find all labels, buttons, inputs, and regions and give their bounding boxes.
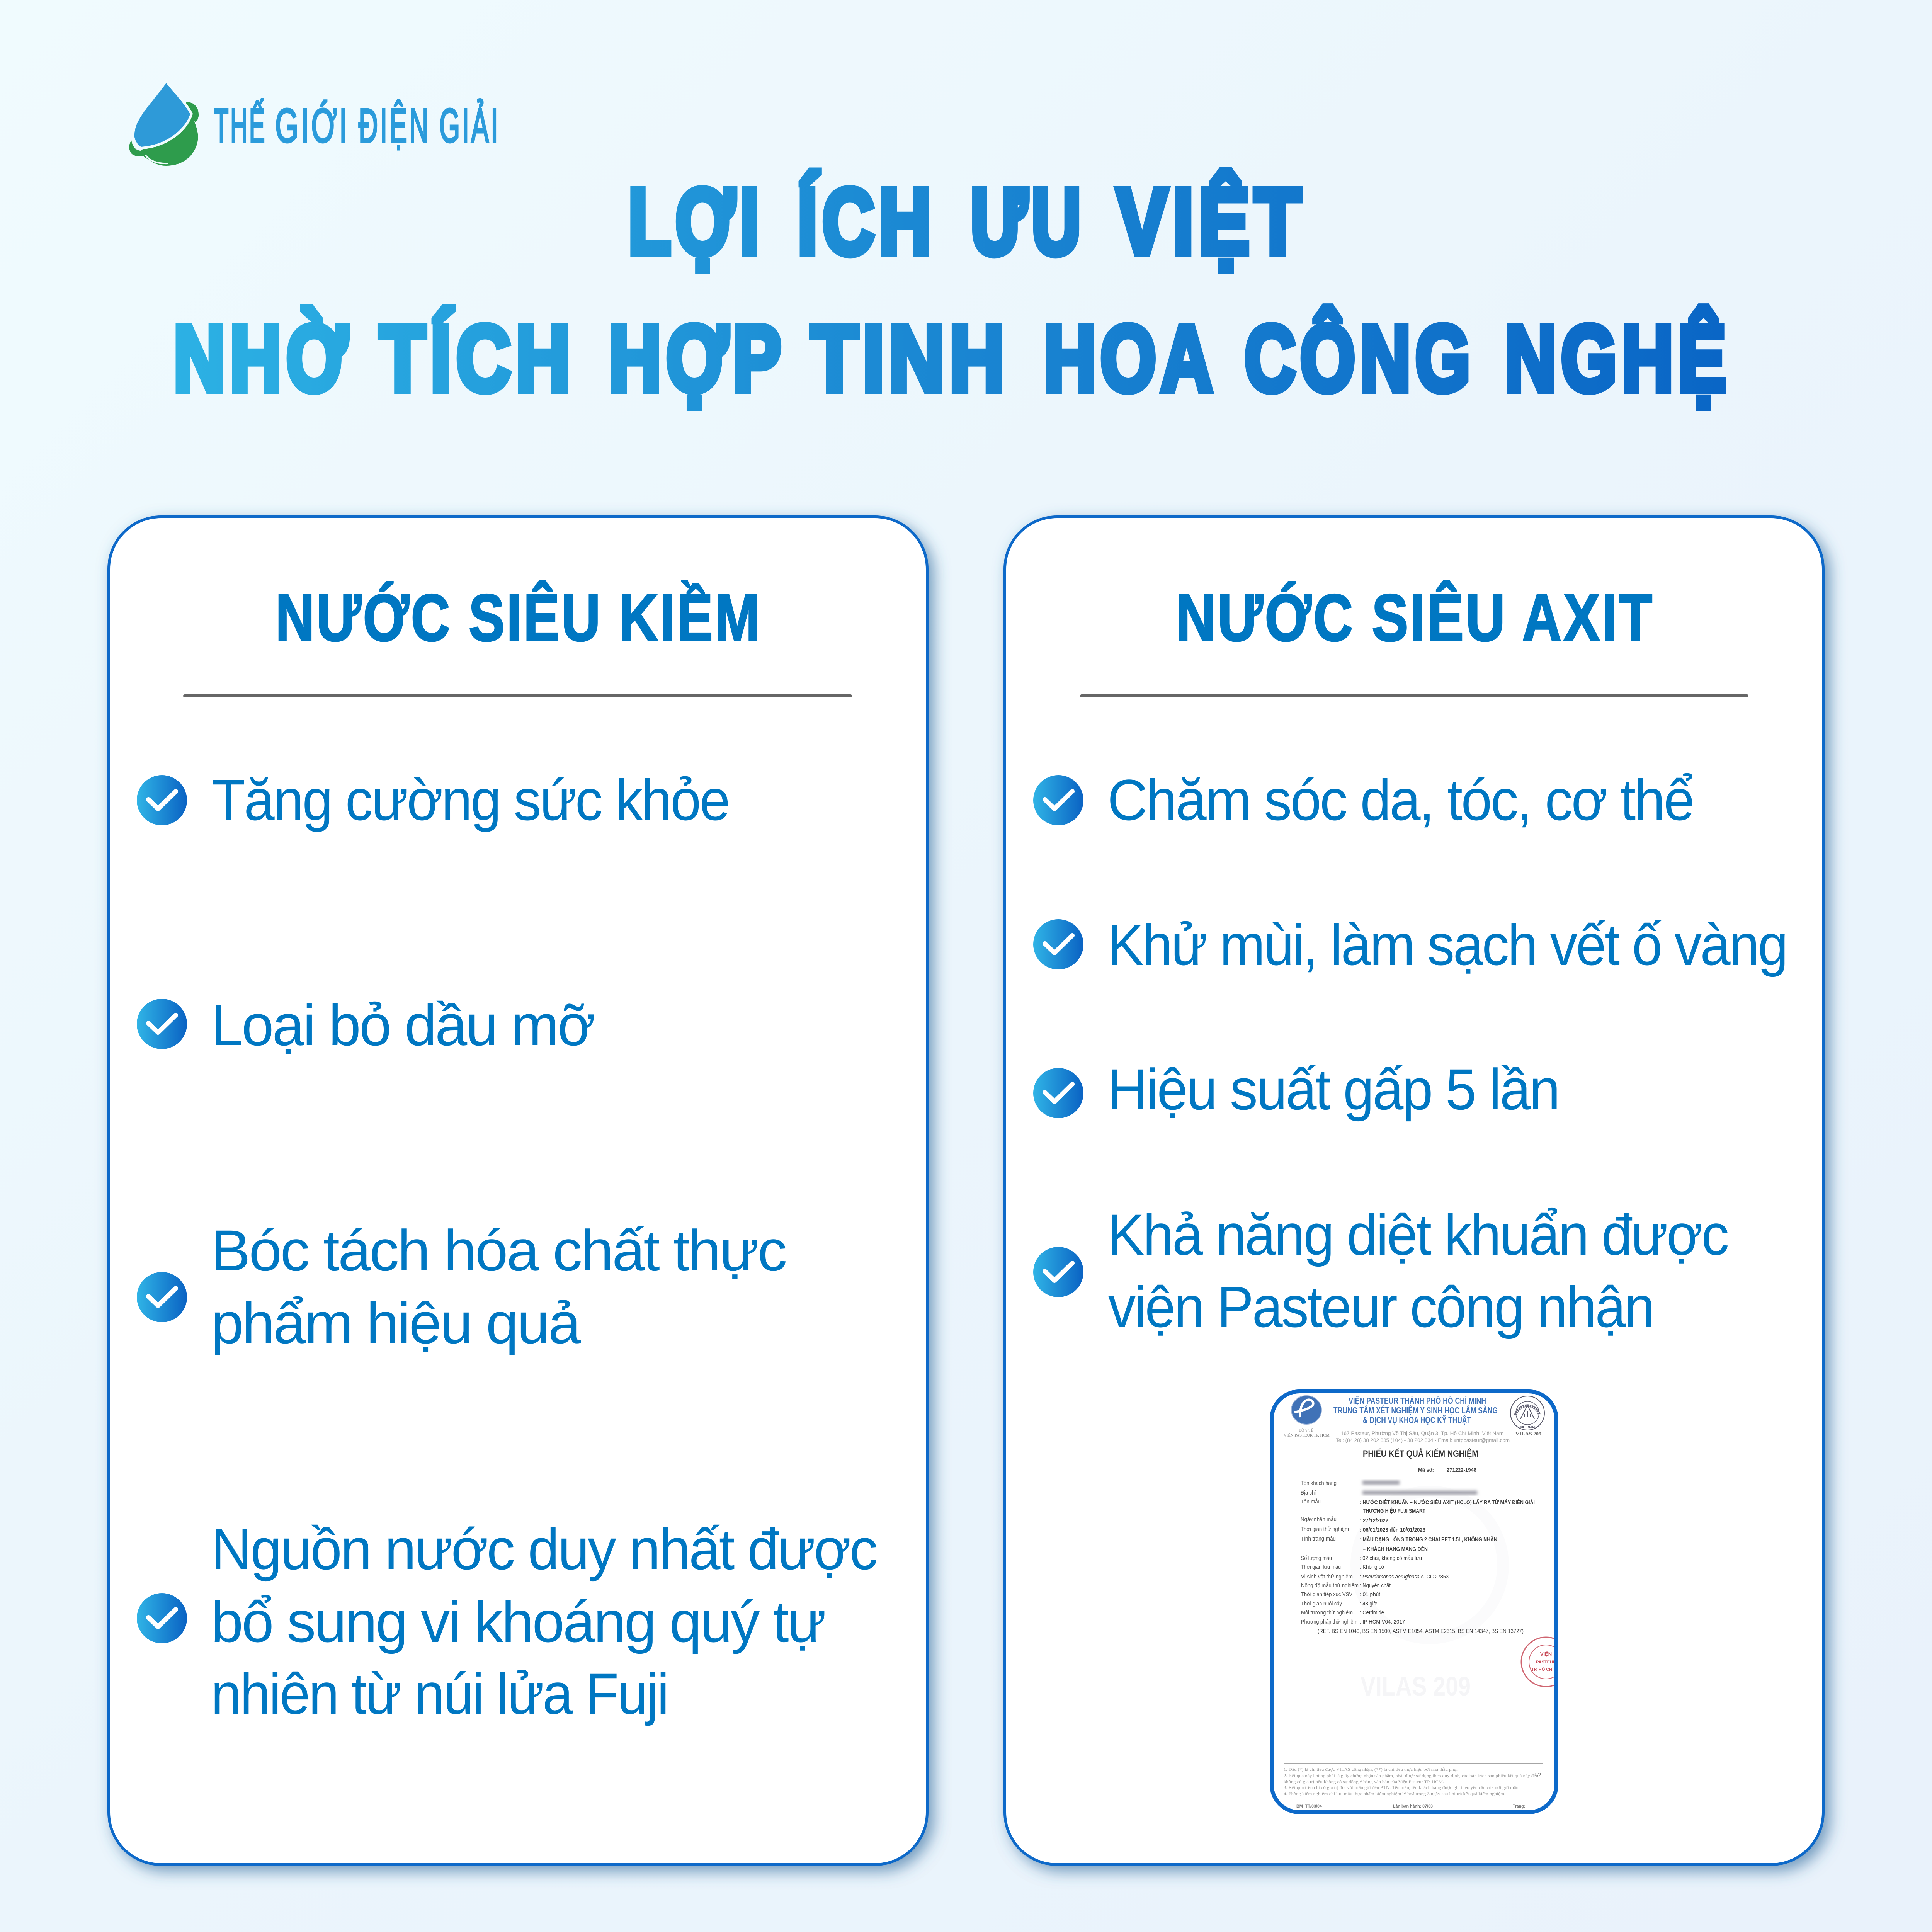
logo wordmark: GIẢI — [439, 99, 500, 153]
title line 1: LỢI — [628, 170, 764, 274]
document field labels: Vi sinh vật thử nghiệm — [1301, 1573, 1353, 1580]
document field values: : 27/12/2022 — [1360, 1517, 1388, 1524]
document field labels: Thời gian nuôi cấy — [1301, 1600, 1342, 1607]
document field labels: Tên khách hàng — [1301, 1480, 1337, 1486]
title — [173, 170, 1731, 411]
benefit: tăng cường sức khỏe: Tăng cường sức khỏe — [212, 767, 729, 832]
footer notes: 2. Kết quả này không phải là giấy chứng nhận sản phẩm, phải được sử dụng theo quy định, các bản trích sao phiếu kết quả này đều — [1284, 1773, 1538, 1778]
footer notes — [1284, 1764, 1543, 1809]
benefit: hiệu suất: Hiệu suất gấp 5 lần — [1107, 1057, 1559, 1122]
document letterhead: VIỆN PASTEUR THÀNH PHỐ HỒ CHÍ MINH — [1349, 1395, 1486, 1406]
document field labels: Tên mẫu — [1301, 1498, 1321, 1505]
benefit: khả năng diệt khuẩn: viện Pasteur công nhận — [1108, 1274, 1653, 1339]
document field values: – KHÁCH HÀNG MANG ĐẾN — [1363, 1546, 1428, 1553]
benefit: chăm sóc da: Chăm sóc da, tóc, cơ thể — [1107, 767, 1693, 832]
document number: 271222-1948 — [1447, 1467, 1476, 1473]
footer notes: 1/2 — [1535, 1772, 1541, 1777]
document letterhead — [1333, 1395, 1510, 1443]
benefit: nguồn nước vi khoáng — [137, 1517, 877, 1726]
document letterhead: 167 Pasteur, Phường Võ Thị Sáu, Quận 3, Tp. Hồ Chí Minh, Việt Nam — [1341, 1430, 1503, 1436]
document field labels: Thời gian lưu mẫu — [1301, 1564, 1341, 1570]
watermark: VILAS 209 — [1361, 1671, 1471, 1701]
test report document — [1272, 1391, 1571, 1812]
document field values: : Nguyên chất — [1360, 1582, 1391, 1589]
document field labels: Thời gian tiếp xúc VSV — [1301, 1591, 1352, 1598]
accreditation logo: VILAS 209 — [1515, 1431, 1542, 1437]
document number — [1418, 1467, 1476, 1473]
blurred customer details — [1362, 1481, 1477, 1495]
panel: nước siêu kiềm — [109, 517, 927, 1865]
document field labels: Môi trường thử nghiệm — [1301, 1609, 1353, 1616]
panel heading: NƯỚC SIÊU KIỀM — [276, 581, 762, 655]
red stamp: PASTEUR — [1536, 1660, 1556, 1665]
document field values: (REF. BS EN 1040, BS EN 1500, ASTM E1054, ASTM E2315, BS EN 14347, BS EN 13727) — [1318, 1628, 1524, 1634]
benefit: bóc tách hóa chất: phẩm hiệu quả — [211, 1291, 581, 1355]
footer notes: không có giá trị nếu không có sự đồng ý bằng văn bản của Viện Pasteur TP. HCM. — [1284, 1779, 1444, 1784]
document field values: : Pseudomonas aeruginosa ATCC 27853 — [1360, 1573, 1449, 1580]
logo wordmark: THẾ — [214, 99, 267, 153]
document field labels: Ngày nhận mẫu — [1301, 1516, 1337, 1523]
benefit: loại bỏ dầu mỡ: Loại bỏ dầu mỡ — [211, 993, 594, 1058]
accreditation logo: VIET NAM — [1520, 1425, 1535, 1429]
document field values: : 06/01/2023 đến 10/01/2023 — [1360, 1527, 1425, 1533]
institute logo: VIỆN PASTEUR TP. HCM — [1284, 1433, 1330, 1438]
benefit: nguồn nước vi khoáng: nhiên từ núi lửa Fuji — [211, 1661, 668, 1726]
title line 2: CÔNG — [1245, 306, 1475, 411]
document field labels: Phương pháp thử nghiệm — [1301, 1619, 1357, 1625]
title line 1: VIỆT — [1117, 170, 1306, 274]
footer notes: 4. Phòng kiểm nghiệm chỉ lưu mẫu thực phẩm kiểm nghiệm lý hoá trong 3 ngày sau khi trả kết quả kiểm nghiệm. — [1284, 1791, 1505, 1796]
panel heading: NƯỚC SIÊU AXIT — [1176, 581, 1654, 655]
document field values: : Cetrimide — [1360, 1609, 1384, 1616]
document field values: : 48 giờ — [1360, 1600, 1377, 1607]
document field values: : NƯỚC DIỆT KHUẨN – NƯỚC SIÊU AXIT (HCLO) LẤY RA TỪ MÁY ĐIỆN GIẢI — [1360, 1499, 1535, 1506]
document field values: : IP HCM V04: 2017 — [1360, 1619, 1405, 1625]
benefit: khả năng diệt khuẩn: Khả năng diệt khuẩn được — [1107, 1202, 1728, 1267]
logo: Thế Giới Điện Giải — [129, 83, 500, 166]
benefit: bóc tách hóa chất: Bóc tách hóa chất thực — [211, 1218, 786, 1283]
footer notes: Trang: — [1513, 1804, 1525, 1809]
red stamp: VIỆN — [1540, 1651, 1552, 1657]
document field labels: Số lượng mẫu — [1301, 1555, 1332, 1561]
institute logo — [1284, 1396, 1330, 1438]
document field values: : Không có — [1360, 1564, 1384, 1570]
red stamp — [1521, 1637, 1571, 1687]
title line 1 — [628, 170, 1306, 274]
document field labels: Địa chỉ — [1301, 1490, 1316, 1496]
logo wordmark: GIỚI — [275, 99, 350, 153]
title line 2 — [173, 306, 1731, 411]
title line 1: ÍCH — [798, 170, 936, 274]
panel: nước siêu axit — [1005, 517, 1823, 1865]
watermark — [1361, 1677, 1470, 1696]
footer notes: 1. Dấu (*) là chỉ tiêu được VILAS công nhận; (**) là chỉ tiêu thực hiện bởi nhà thầu phụ. — [1284, 1767, 1458, 1772]
benefit: bóc tách hóa chất — [137, 1218, 786, 1355]
document field values — [1318, 1499, 1535, 1634]
title line 2: HOA — [1044, 306, 1217, 411]
document field values: : 01 phút — [1360, 1591, 1381, 1598]
document field values: : 02 chai, không có mẫu lưu — [1360, 1555, 1422, 1561]
document letterhead: & DỊCH VỤ KHOA HỌC KỸ THUẬT — [1363, 1415, 1471, 1425]
document field labels: Thời gian thử nghiệm — [1301, 1526, 1349, 1532]
title line 2: HỢP — [609, 306, 786, 411]
title line 2: TÍCH — [379, 306, 575, 411]
title line 2: TINH — [811, 306, 1010, 411]
logo wordmark: ĐIỆN — [359, 99, 430, 153]
icon: water drop with green swoosh — [129, 83, 199, 166]
footer notes: BM_TT/03/04 — [1296, 1804, 1322, 1809]
document field labels: Nồng độ mẫu thử nghiệm — [1301, 1582, 1359, 1589]
logo wordmark — [214, 99, 500, 153]
benefit: nguồn nước vi khoáng: Nguồn nước duy nhất được — [211, 1517, 877, 1582]
footer notes: 3. Kết quả trên chỉ có giá trị đối với mẫu gửi đến PTN. Tên mẫu, tên khách hàng được ghi theo yêu cầu của nơi gửi mẫu. — [1284, 1785, 1520, 1790]
title line 1: ƯU — [971, 170, 1085, 274]
title line 2: NGHỆ — [1505, 306, 1731, 411]
document field labels: Tình trạng mẫu — [1301, 1536, 1336, 1542]
title line 2: NHỜ — [173, 306, 352, 411]
benefit: khả năng diệt khuẩn — [1033, 1202, 1728, 1339]
red stamp: TP. HỒ CHÍ MINH — [1531, 1667, 1565, 1672]
benefit: khử mùi: Khử mùi, làm sạch vết ố vàng — [1107, 912, 1787, 977]
document field values: THƯƠNG HIỆU FUJI SMART — [1363, 1507, 1425, 1514]
document letterhead: TRUNG TÂM XÉT NGHIỆM Y SINH HỌC LÂM SÀNG — [1333, 1405, 1498, 1415]
document field values: : MẪU DẠNG LỎNG TRONG 2 CHAI PET 1.5L, KHÔNG NHÃN — [1360, 1536, 1497, 1543]
footer notes: Lần ban hành: 07/03 — [1393, 1804, 1433, 1809]
accreditation logo — [1510, 1396, 1544, 1437]
document title: PHIẾU KẾT QUẢ KIỂM NGHIỆM — [1363, 1448, 1478, 1459]
document number: Mã số: — [1418, 1467, 1434, 1473]
benefit: nguồn nước vi khoáng: bổ sung vi khoáng quý tự — [211, 1589, 825, 1654]
document field labels — [1301, 1480, 1359, 1625]
institute logo: BỘ Y TẾ — [1299, 1428, 1313, 1433]
document letterhead: Tel: (84 28) 38 202 835 (104) - 38 202 834 - Email: xntppasteur@gmail.com — [1336, 1437, 1510, 1443]
